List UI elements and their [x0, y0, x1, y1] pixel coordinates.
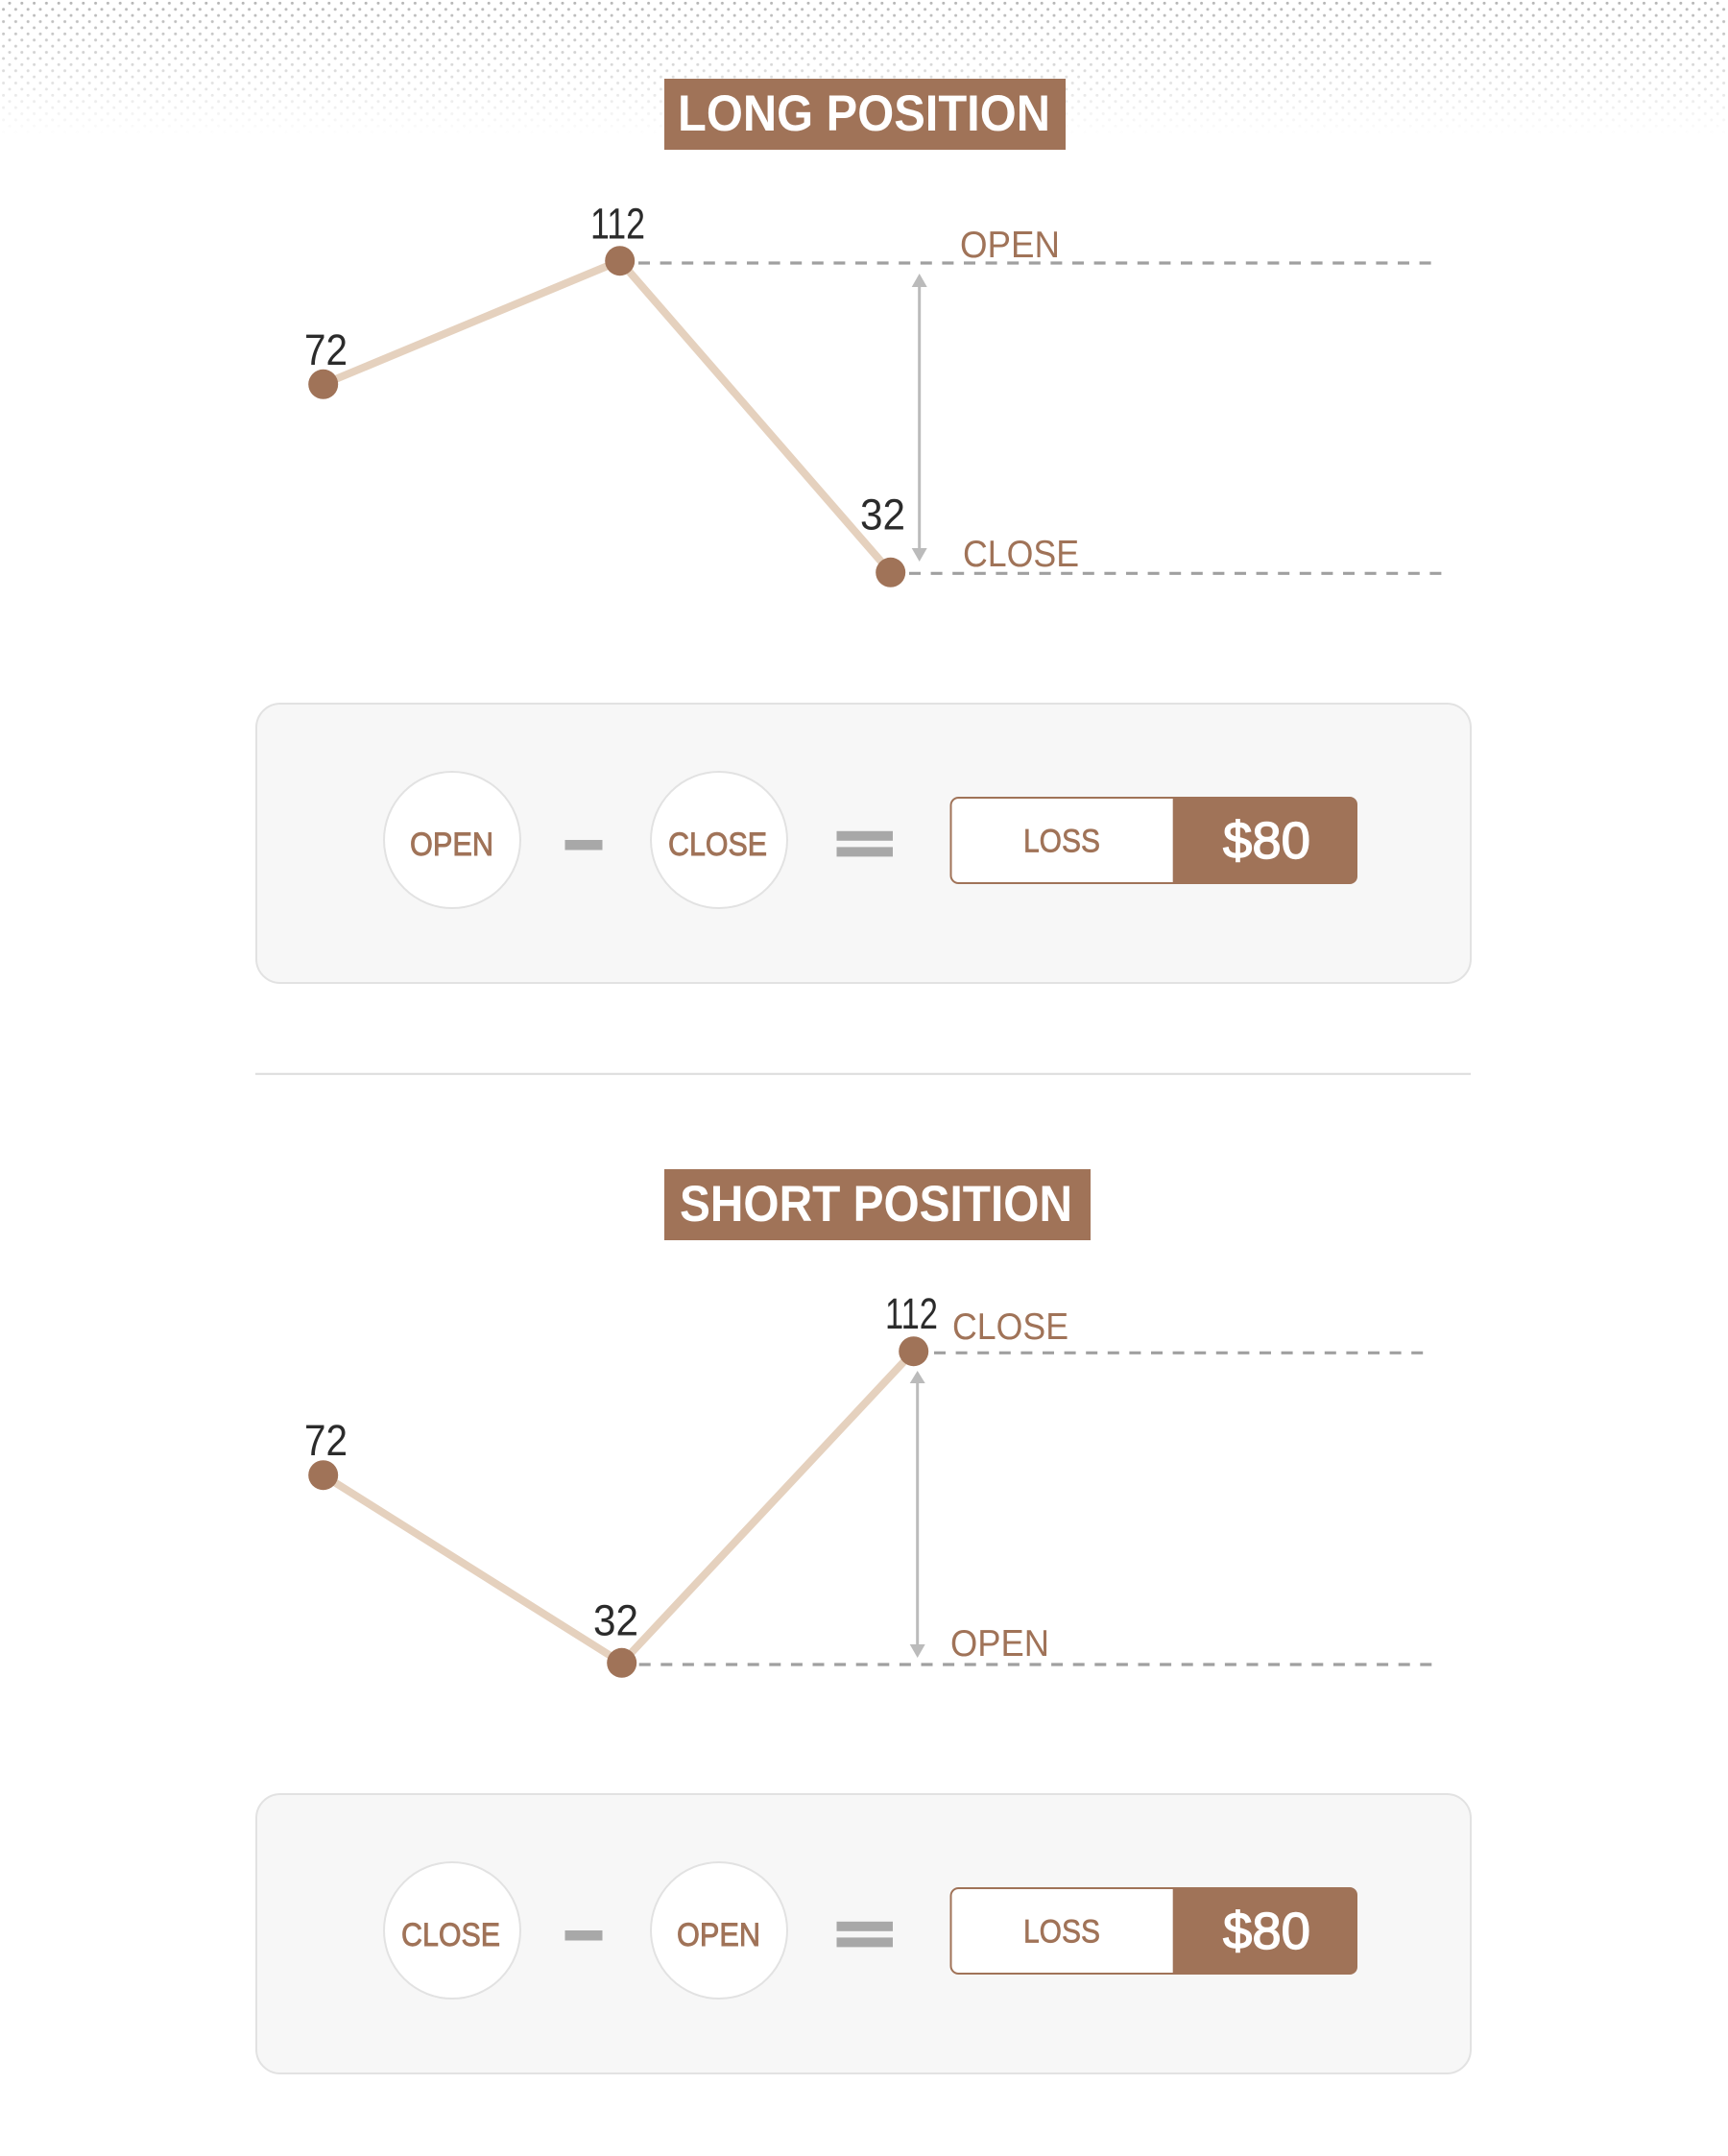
value: 32: 32 — [860, 490, 905, 539]
circle: close — [384, 1862, 520, 1999]
label: open: OPEN — [950, 1623, 1049, 1665]
point: 72 — [308, 1460, 338, 1490]
result: loss $80 — [950, 1887, 1357, 1975]
heading: long position: LONG POSITION — [678, 85, 1050, 142]
heading: short position: SHORT POSITION — [680, 1176, 1072, 1233]
value: 72: 72 — [304, 1416, 348, 1465]
panel: long position formula — [256, 704, 1471, 983]
circle: close: CLOSE — [401, 1917, 500, 1953]
label: open: OPEN — [960, 225, 1060, 266]
circle: open — [384, 772, 520, 908]
point: 112 — [605, 246, 635, 275]
point: 72 — [308, 370, 338, 399]
result: loss $80: $80 — [1223, 1903, 1310, 1960]
section: short position — [256, 1169, 1471, 2073]
point: 32 — [876, 558, 905, 587]
point: 112 — [899, 1336, 928, 1366]
equals sign — [837, 1922, 893, 1947]
section: long position — [256, 79, 1471, 983]
line chart: long position — [304, 200, 1446, 587]
circle: close — [651, 772, 787, 908]
line chart: short position — [304, 1289, 1436, 1678]
circle: open — [651, 1862, 787, 1999]
divider — [255, 1073, 1471, 1075]
arrow: close to open range — [910, 1371, 925, 1658]
circle: close: CLOSE — [668, 826, 767, 863]
dashed level: close — [934, 1352, 1432, 1354]
label: close: CLOSE — [963, 534, 1079, 575]
value: 112: 112 — [590, 200, 645, 248]
arrow: open to close range — [912, 274, 927, 562]
point: 32 — [607, 1648, 636, 1678]
result: loss $80: $80 — [1223, 812, 1310, 870]
value: 112: 112 — [885, 1289, 938, 1338]
value: 72: 72 — [304, 325, 348, 374]
dashed level: open — [639, 1663, 1436, 1666]
equals sign — [837, 831, 893, 856]
panel: short position formula — [256, 1794, 1471, 2073]
result: loss $80: LOSS — [1023, 1914, 1100, 1951]
minus sign — [564, 840, 603, 850]
result: loss $80: LOSS — [1023, 824, 1100, 860]
dashed level: open — [638, 261, 1435, 265]
value: 32: 32 — [593, 1595, 638, 1645]
result: loss $80 — [950, 797, 1357, 884]
circle: open: OPEN — [677, 1917, 760, 1953]
circle: open: OPEN — [410, 826, 493, 863]
label: close: CLOSE — [952, 1306, 1068, 1348]
dashed level: close — [909, 572, 1446, 575]
minus sign — [564, 1930, 603, 1941]
